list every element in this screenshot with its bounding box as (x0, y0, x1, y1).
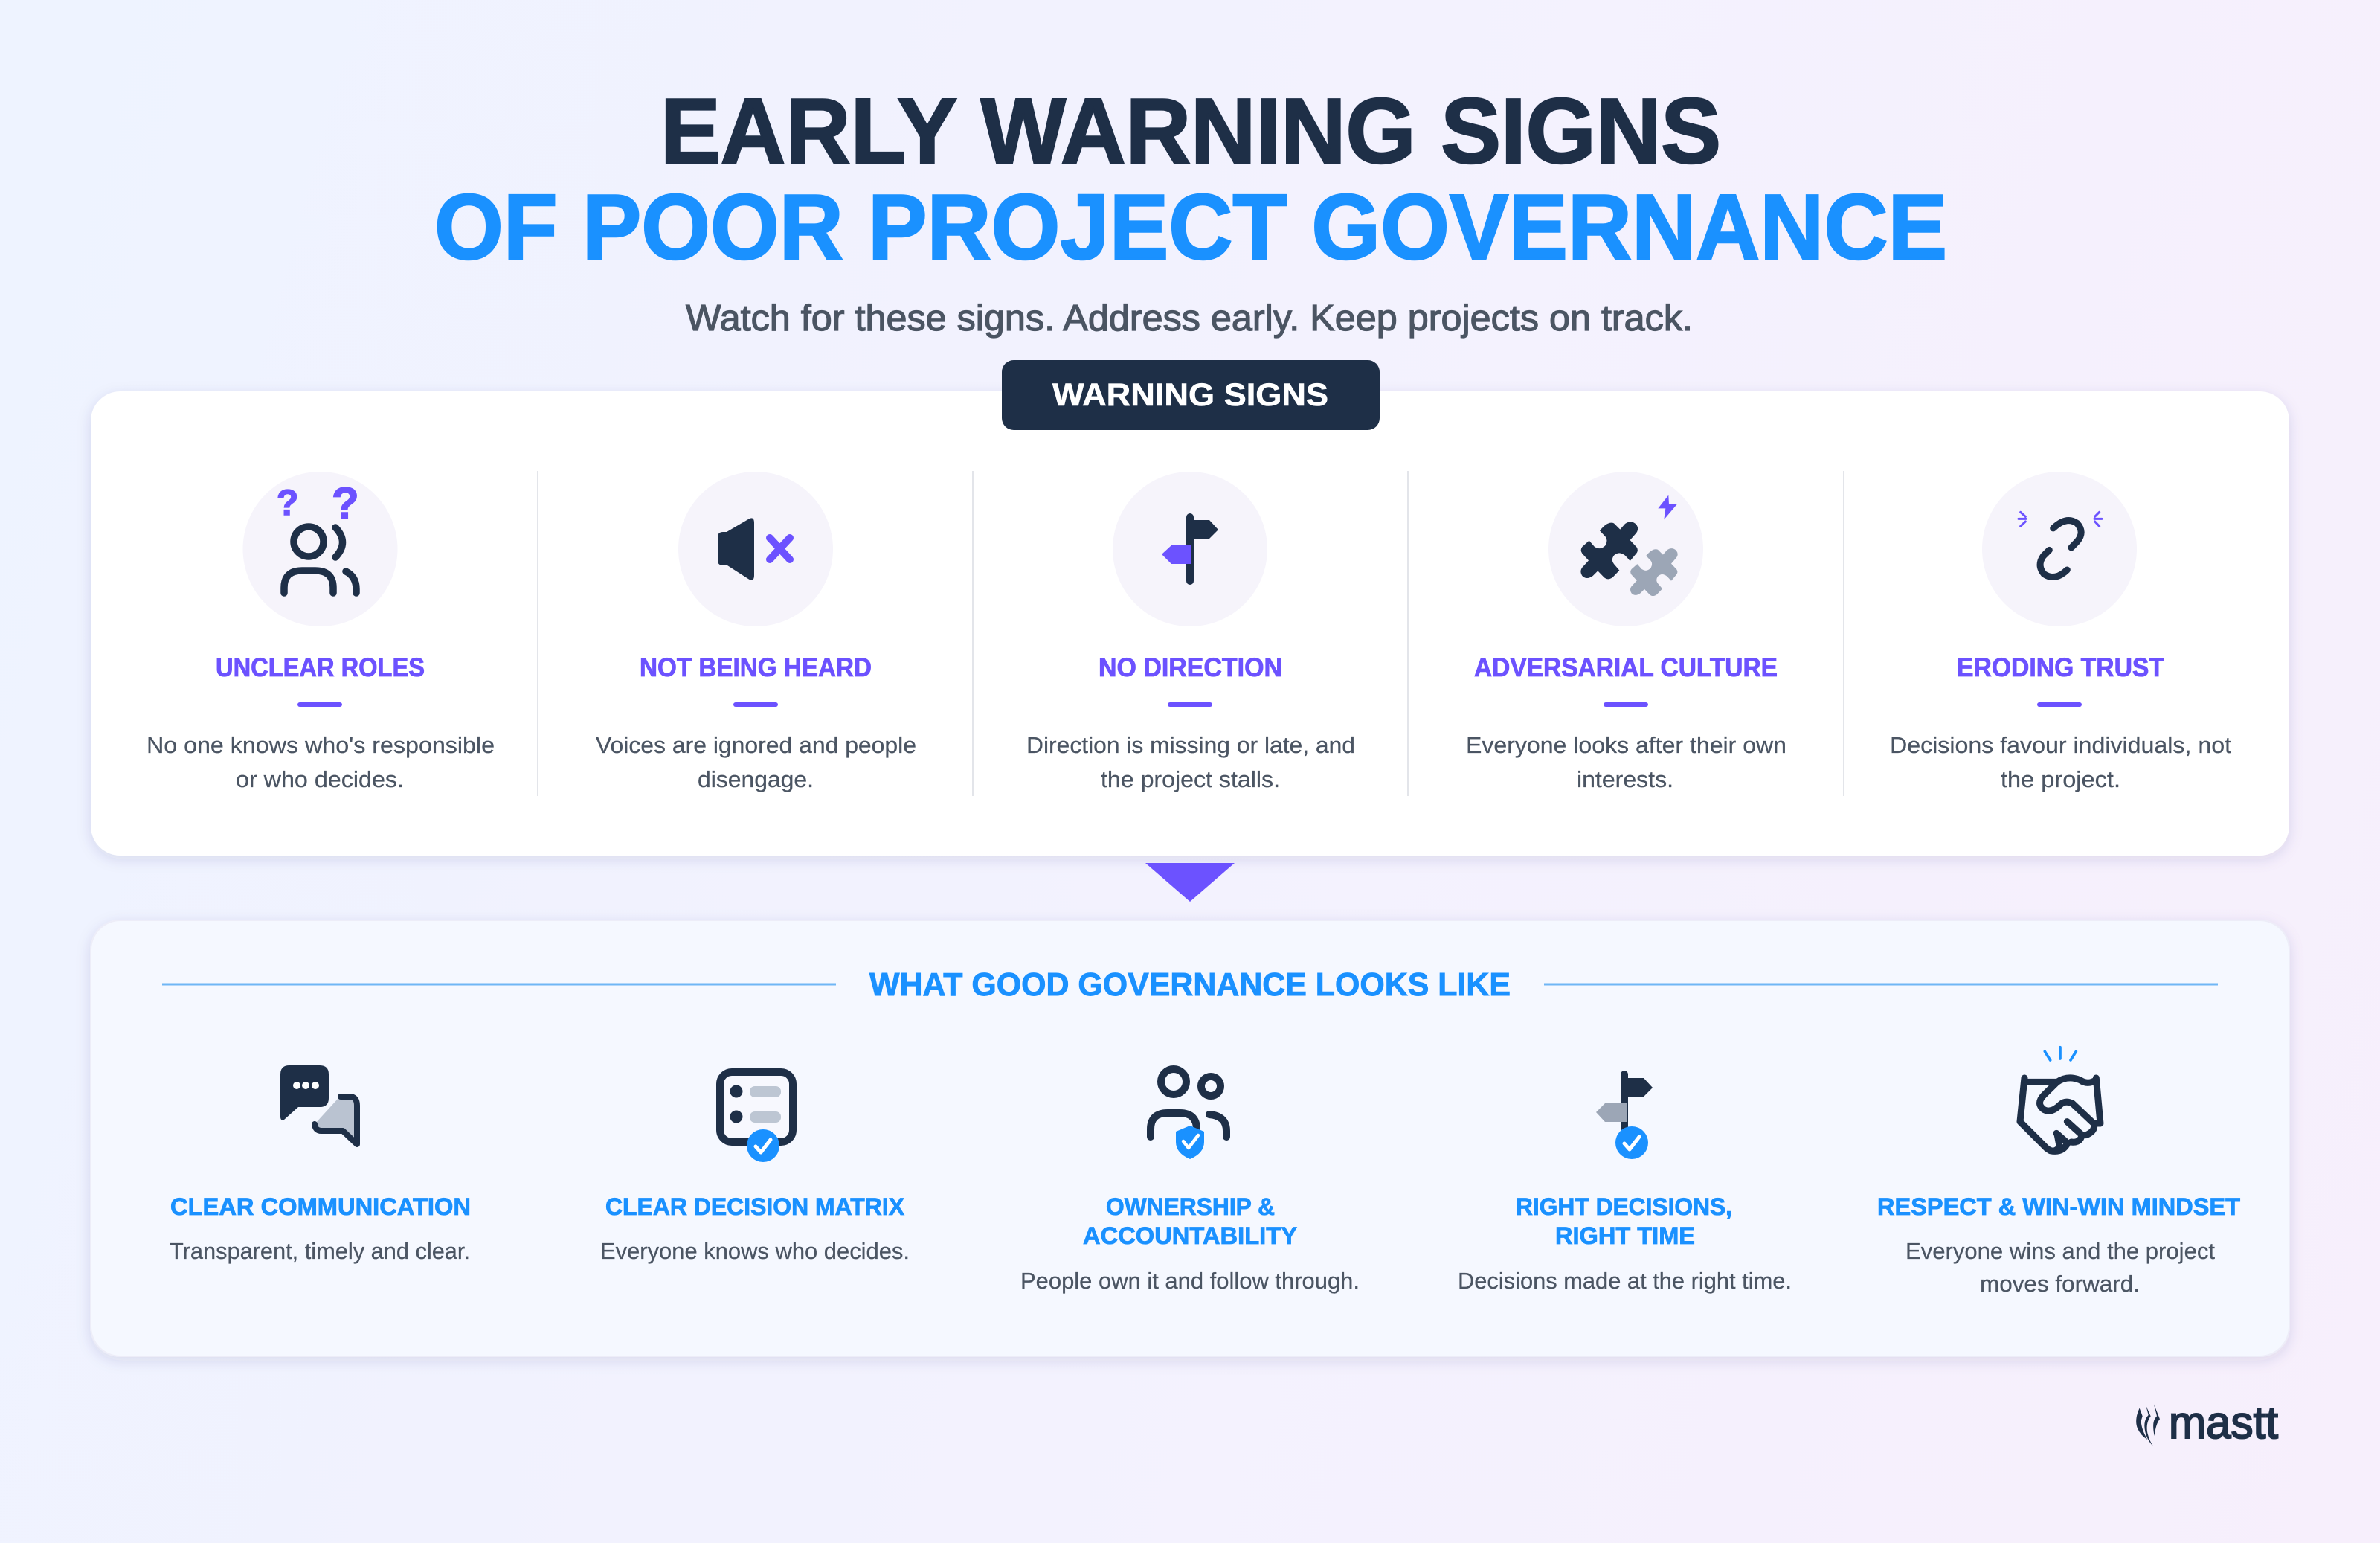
heading: ERODING TRUST (1957, 653, 2164, 682)
sign: no direction (1026, 472, 1355, 792)
description: Direction is missing or late, and (1026, 732, 1355, 758)
logo: mastt (2136, 1397, 2278, 1448)
icon: confused people: ? (277, 484, 298, 523)
description: Voices are ignored and people (596, 732, 916, 758)
practice: respect and win-win mindset (1877, 1048, 2240, 1297)
heading: ACCOUNTABILITY (1083, 1222, 1297, 1249)
sign: unclear roles (147, 472, 495, 792)
icon: confused people (242, 472, 397, 626)
description: the project stalls. (1101, 766, 1280, 792)
description: Decisions favour individuals, not (1890, 732, 2231, 758)
heading: OWNERSHIP & (1106, 1193, 1275, 1220)
description (1466, 732, 1786, 792)
description (1026, 732, 1355, 792)
title: OF POOR PROJECT GOVERNANCE (434, 176, 1947, 279)
description: interests. (1577, 766, 1673, 792)
section heading: WHAT GOOD GOVERNANCE LOOKS LIKE (869, 966, 1511, 1003)
description: Transparent, timely and clear. (170, 1238, 470, 1264)
heading: NOT BEING HEARD (640, 653, 872, 682)
description: disengage. (698, 766, 814, 792)
description: Everyone looks after their own (1466, 732, 1786, 758)
icon: handshake (2020, 1048, 2100, 1151)
icon: signpost (1113, 472, 1267, 626)
heading: CLEAR COMMUNICATION (170, 1193, 471, 1220)
accent dash (298, 702, 342, 707)
icon: muted speaker (678, 472, 833, 626)
panel: warning signs (91, 360, 2289, 856)
good governance card background (91, 920, 2289, 1356)
practice: clear communication (170, 1065, 471, 1264)
title (434, 80, 1947, 279)
panel: good governance (91, 920, 2289, 1356)
warning signs badge (1002, 360, 1380, 430)
icon: confused people: ? (332, 478, 359, 528)
sign: not being heard (596, 472, 916, 792)
sign: eroding trust (1890, 472, 2231, 792)
heading: ADVERSARIAL CULTURE (1474, 653, 1778, 682)
description: People own it and follow through. (1020, 1268, 1360, 1294)
heading: RIGHT DECISIONS, (1516, 1193, 1732, 1220)
description (1905, 1238, 2215, 1297)
description (596, 732, 916, 792)
description: or who decides. (236, 766, 404, 792)
icon: signpost with check (1596, 1074, 1653, 1159)
warning signs badge: WARNING SIGNS (1052, 377, 1328, 413)
description (1890, 732, 2231, 792)
description (147, 732, 495, 792)
description: the project. (2001, 766, 2120, 792)
accent dash (1168, 702, 1212, 707)
warning signs card background (91, 391, 2289, 856)
icon: broken chain link (1982, 472, 2137, 626)
accent dash (1604, 702, 1648, 707)
heading: UNCLEAR ROLES (216, 653, 425, 682)
column dividers (538, 471, 1844, 796)
icon: speech bubbles (280, 1065, 357, 1144)
heading: RIGHT TIME (1555, 1222, 1695, 1249)
subtitle: Watch for these signs. Address early. Keep projects on track. (686, 298, 1693, 339)
title: EARLY WARNING SIGNS (660, 80, 1721, 183)
accent dash (2037, 702, 2082, 707)
icon: checklist matrix (720, 1072, 793, 1162)
sign: adversarial culture (1466, 472, 1786, 792)
description: Decisions made at the right time. (1458, 1268, 1792, 1294)
description: Everyone wins and the project (1905, 1238, 2215, 1264)
icon: people with shield (1151, 1069, 1226, 1159)
description: Everyone knows who decides. (600, 1238, 910, 1264)
logo mark (2136, 1404, 2160, 1446)
arrow: down to good governance (1145, 863, 1235, 902)
description: No one knows who's responsible (147, 732, 495, 758)
icon: puzzle pieces and spark (1548, 472, 1703, 626)
heading: CLEAR DECISION MATRIX (605, 1193, 905, 1220)
accent dash (733, 702, 778, 707)
practice: right decisions, right time (1458, 1074, 1792, 1294)
heading: RESPECT & WIN-WIN MINDSET (1877, 1193, 2240, 1220)
description: moves forward. (1980, 1271, 2140, 1297)
section heading rules (162, 984, 2218, 985)
heading: NO DIRECTION (1099, 653, 1282, 682)
practice: clear decision matrix (600, 1072, 910, 1264)
heading (1083, 1193, 1297, 1249)
heading (1516, 1193, 1732, 1249)
practice: ownership and accountability (1020, 1069, 1360, 1294)
logo wordmark: mastt (2169, 1397, 2278, 1448)
